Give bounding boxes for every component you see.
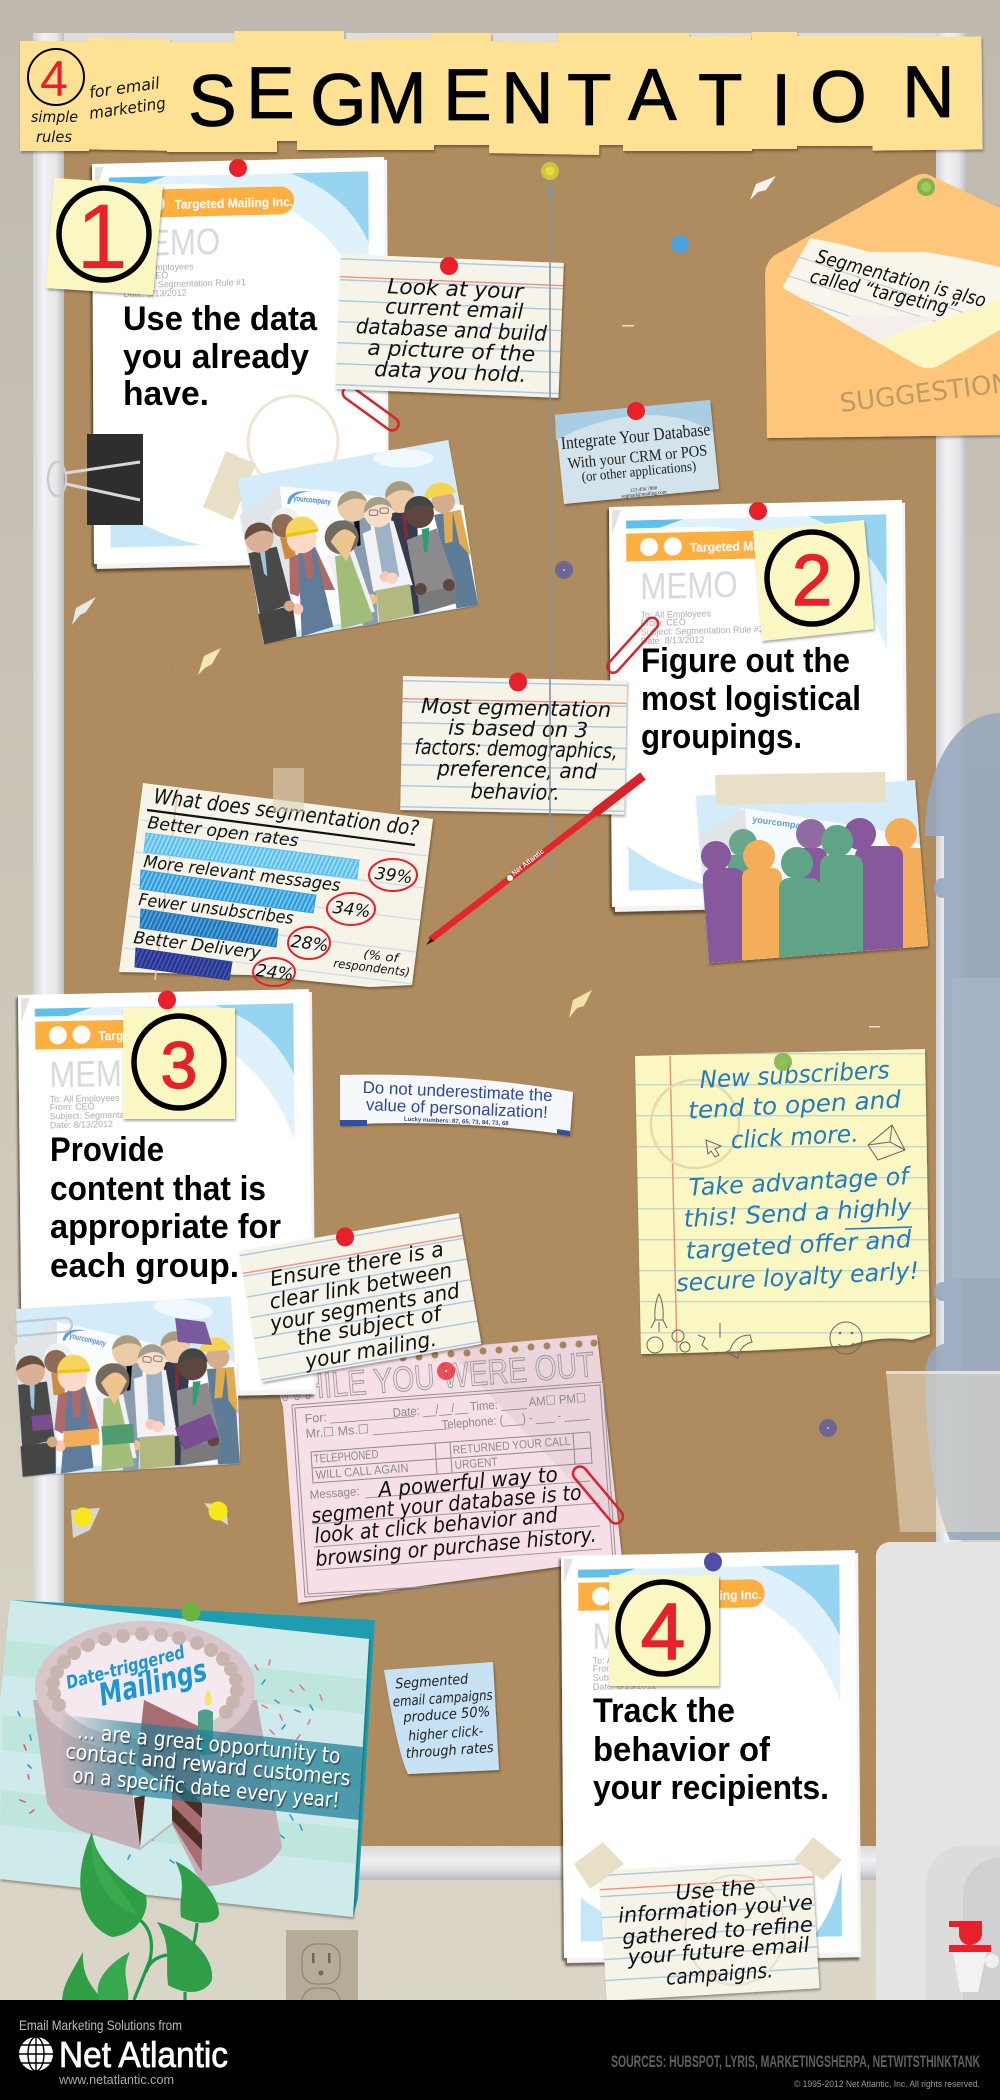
memo 2 details: Date: 8/13/2012 — [641, 635, 704, 646]
red pen: Net Atlantic — [511, 848, 546, 878]
index note: most segmentation: is based on 3 — [448, 716, 588, 742]
row: better delivery 24%: 24% — [255, 961, 295, 985]
Net Atlantic wordmark: Net Atlantic — [59, 2034, 228, 2075]
while you were out pink note: TELEPHONED — [313, 1447, 379, 1466]
memo 1 details: From: CEO — [123, 270, 168, 281]
fortune slip: personalization: Lucky numbers: 87, 65, 73, 84, 73, 68 — [404, 1117, 509, 1127]
red paperclip on memo 1 — [340, 384, 401, 433]
photo: crew holding envelopes — [0, 1271, 260, 1502]
sticky note with number 2 — [753, 520, 874, 641]
memo 4 details — [593, 1653, 717, 1692]
sticky note with number 3 — [123, 1008, 235, 1119]
while you were out pink note — [270, 1335, 622, 1603]
sticky note with number 1: 1 — [76, 186, 128, 288]
business card: integrate your database: Integrate Your Database — [560, 419, 711, 453]
title subtitle: for email marketing: marketing — [88, 93, 167, 123]
memo 3 details: Date: 8/13/2012 — [50, 1119, 113, 1130]
memo 4 heading: track the behavior: behavior of — [593, 1731, 771, 1769]
pin: green on yellow note — [774, 1053, 792, 1071]
orange group — [742, 840, 782, 968]
memo 4 heading: track the behavior: your recipients. — [593, 1769, 829, 1807]
blue handwriting — [676, 1056, 920, 1297]
row: more relevant messages 34%: 34% — [332, 898, 372, 922]
envelope: suggestion — [765, 174, 1000, 438]
cork board surface — [64, 45, 936, 1846]
card title: Date-triggered — [64, 1642, 188, 1694]
row: fewer unsubscribes 28%: Fewer unsubscribes — [137, 890, 295, 929]
row: more relevant messages 34%: More relevant messages — [142, 852, 341, 896]
title subtitle: for email marketing: for email — [88, 73, 161, 102]
electrical outlet — [286, 1930, 358, 2018]
blue handwriting: this! Send a highly — [683, 1193, 913, 1233]
frosting beads — [46, 1627, 244, 1719]
row: better open rates 39% — [144, 813, 417, 891]
red pen — [426, 776, 643, 945]
pin: red on memo 2 — [749, 502, 767, 520]
while you were out pink note: WILL CALL AGAIN — [315, 1461, 409, 1482]
chart title: What does segmentation do? — [152, 784, 420, 841]
fortune slip: personalization: value of personalization! — [366, 1095, 548, 1122]
index note: ensure clear link: Ensure there is a — [268, 1237, 446, 1291]
memo 2 details: To: All Employees — [641, 609, 712, 620]
green group — [779, 825, 863, 968]
pin: yellow left with torn corner — [71, 1508, 100, 1538]
water cooler bottle — [925, 713, 1000, 1540]
envelope front pocket — [766, 278, 1000, 438]
memo 4 MEMO heading: MEMO — [592, 1613, 690, 1657]
form labels — [304, 1391, 591, 1441]
title subtitle: for email marketing — [88, 73, 167, 123]
business card: integrate your database: segmail@mailing.com — [621, 490, 667, 500]
chart note: what does segmentation do — [119, 783, 433, 987]
while you were out pink note: URGENT — [454, 1455, 499, 1472]
back row figures — [728, 818, 929, 968]
memo 4 details: To: All Employees — [593, 1654, 664, 1666]
index note: most segmentation: behavior. — [470, 779, 560, 805]
note inside envelope — [780, 238, 1000, 370]
index note: ensure clear link: your mailing. — [302, 1327, 438, 1374]
logo text: yourcompany — [68, 1331, 107, 1348]
handwritten message — [310, 1462, 597, 1571]
title badge: 4 simple rules: simple — [31, 108, 78, 126]
index note: look at your data: database and build — [355, 314, 548, 346]
memo 3 details — [50, 1092, 172, 1130]
chart footnote: respondents) — [333, 956, 411, 979]
pin: red on business card — [627, 402, 645, 420]
index note: use the information: information you've — [617, 1890, 814, 1928]
index note: ensure clear link: your segments and — [267, 1279, 462, 1336]
pin: red on note 1 — [440, 257, 458, 275]
row: better open rates 39%: Better open rates — [146, 813, 300, 852]
row: better delivery 24%: Better Delivery — [132, 928, 263, 964]
water bottle highlight panel — [952, 978, 1000, 1278]
blue handwriting: tend to open and — [687, 1085, 902, 1125]
title badge: 4 simple rules — [28, 49, 84, 146]
date-triggered mailings card — [0, 1600, 375, 1917]
handwritten message: look at click behavior and — [313, 1503, 559, 1548]
memo 3 details: Subject: Segmentation Rule #3 — [50, 1109, 172, 1121]
form labels: Mr.☐ Ms.☐ ___________ — [305, 1416, 450, 1441]
chart footnote: (% of — [363, 947, 401, 965]
title badge: 4 simple rules: rules — [36, 128, 72, 146]
outlined heading: WHILE YOU WERE OUT — [276, 1345, 596, 1409]
blue handwriting: Take advantage of — [688, 1162, 913, 1202]
pin: green on envelope — [917, 178, 935, 196]
blue sticky: segmented campaigns — [384, 1662, 499, 1774]
memo 1 coffee ring — [248, 396, 338, 488]
business card: integrate your database: 123.456.7890 — [630, 486, 658, 494]
index note: use the information: campaigns. — [665, 1958, 774, 1990]
water cooler base — [876, 1542, 1000, 2000]
business card: integrate your database: (or other applications) — [581, 459, 697, 485]
pen logo — [507, 875, 513, 881]
form labels: For: ____________ — [304, 1403, 415, 1426]
memo 3 MEMO heading: MEMO — [49, 1052, 146, 1095]
pin: red on memo 1 — [229, 159, 247, 177]
doodle: cubes and dinosaur — [647, 1323, 752, 1358]
sticky note with number 2: 2 — [792, 541, 832, 621]
teal banner — [57, 1715, 363, 1820]
tape right on note — [794, 1837, 842, 1880]
memo 3 heading: provide content: appropriate for — [50, 1208, 281, 1246]
paper scraps on cork — [72, 176, 880, 1028]
memo 1 heading: use the data: have. — [123, 375, 209, 413]
blue sticky: segmented campaigns: email campaigns — [392, 1688, 493, 1710]
memo 3 sheet — [18, 989, 316, 1400]
handwritten message: browsing or purchase history. — [314, 1522, 597, 1571]
memo 3 heading: provide content: each group. — [50, 1247, 239, 1285]
index note: most segmentation — [400, 676, 627, 815]
pin: yellow right with torn corner — [204, 1502, 228, 1525]
note inside envelope: called “targeting” — [808, 265, 959, 321]
index note: look at your data: data you hold. — [374, 357, 527, 387]
blue sticky: segmented campaigns: higher click- — [408, 1723, 484, 1745]
index note: most segmentation: preference, and — [436, 756, 598, 784]
memo 2 letterhead: Targeted Mailing Inc. — [690, 537, 809, 555]
translucent tape on chart note — [273, 768, 304, 812]
blue sticky: segmented campaigns: produce 50% — [402, 1704, 491, 1726]
memo 3 heading: provide content: Provide — [50, 1131, 164, 1169]
yellow lined note: new subscribers — [635, 1049, 930, 1358]
memo 4 letterhead: Targeted Mailing Inc. — [642, 1587, 762, 1605]
chart footnote — [333, 947, 411, 979]
form labels: Telephone: (___) - ___ - ____ — [441, 1406, 591, 1432]
photo: mailing crew — [237, 440, 478, 644]
photo: silhouette groups — [696, 780, 930, 968]
form writing lines — [312, 1481, 602, 1570]
index note: look at your data: Look at your — [387, 274, 525, 304]
memo 4 heading: track the behavior: Track the — [593, 1692, 735, 1730]
memo 2 heading: figure out the groupings — [641, 642, 861, 756]
index note: look at your data: current email — [385, 294, 524, 324]
tape on memo 1 — [203, 451, 256, 520]
sticky note with number 4: 4 — [641, 1587, 685, 1676]
memo 1 sheet — [92, 157, 389, 569]
memo 1 letterhead: Targeted Mailing Inc. — [174, 194, 293, 212]
business card: integrate your database: With your CRM or POS — [567, 442, 708, 473]
sticky note with number 4 — [609, 1575, 719, 1686]
footer tagline: Email Marketing Solutions from — [19, 2017, 182, 2033]
confetti sprinkles — [18, 1660, 322, 1863]
pin: blue-purple on memo 4 — [704, 1552, 722, 1572]
memo 2 details — [641, 607, 764, 646]
blue sticky: segmented campaigns: through rates — [405, 1740, 494, 1762]
memo 2 heading: figure out the groupings: Figure out the — [641, 642, 850, 680]
copyright: © 1995-2012 Net Atlantic, Inc. All rights reserved. — [794, 2079, 980, 2090]
memo 2 details: From: CEO — [641, 617, 686, 628]
title: segmentation: SEGMENTATION — [188, 52, 955, 142]
memo 1 details — [123, 260, 246, 299]
row: fewer unsubscribes 28% — [137, 890, 330, 959]
doodle: cursor — [706, 1140, 721, 1157]
blue handwriting: click more. — [730, 1120, 859, 1154]
handwritten message: A powerful way to — [375, 1462, 559, 1502]
pin: purple — [555, 561, 573, 579]
water cooler red tap — [949, 1921, 991, 1952]
memo 1 heading: use the data: Use the data — [123, 300, 318, 338]
index note: use the information: Use the — [675, 1875, 756, 1905]
paper cup stack — [886, 1371, 1000, 1532]
globe logo — [19, 2037, 53, 2071]
purple group — [701, 818, 903, 968]
sticky note with number 1 — [46, 178, 163, 295]
memo 1 details: Date: 8/13/2012 — [123, 288, 187, 299]
memo 3 heading: provide content: content that is — [50, 1170, 266, 1208]
pin: translucent red on pink note — [437, 1362, 455, 1380]
memo 2 heading: figure out the groupings: groupings. — [641, 718, 802, 756]
form checkbox table — [311, 1432, 592, 1483]
red paperclip on memo 2 — [605, 615, 661, 675]
while you were out pink note: Message: — [309, 1484, 360, 1502]
memo 1 details: Subject: Segmentation Rule #1 — [123, 277, 246, 290]
memo 3 letterhead: Targeted Mailing Inc. — [98, 1026, 217, 1043]
doodle: rocket — [651, 1294, 667, 1332]
index note: most segmentation: Most egmentation — [421, 694, 611, 722]
memo 3 details: To: All Employees — [50, 1093, 120, 1104]
doodle: smiley — [830, 1322, 862, 1354]
memo 1 details: To: All Employees — [123, 262, 194, 273]
index note: use the information — [599, 1858, 819, 2001]
form labels: Date: __/__/__ Time: ____ AM☐ PM☐ — [392, 1391, 587, 1420]
website: www.netatlantic.com — [58, 2072, 174, 2087]
memo 1 heading: use the data — [123, 300, 318, 413]
spiral holes — [400, 1340, 598, 1362]
memo 3 details: From: CEO — [50, 1101, 95, 1112]
memo 2 sheet — [609, 500, 908, 912]
logo text: yourcompany — [752, 814, 812, 832]
row: better delivery 24% — [132, 928, 295, 986]
index note: use the information: your future email — [626, 1933, 810, 1969]
index note: ensure clear link: clear link between — [268, 1258, 454, 1314]
doodle: envelope — [868, 1125, 905, 1160]
pin: red on ensure note — [336, 1228, 354, 1246]
hanging string with yellow pin — [541, 162, 559, 876]
memo 1 MEMO heading: MEMO — [123, 221, 220, 264]
cake — [33, 1621, 282, 1887]
memo 2 heading: figure out the groupings: most logistical — [641, 680, 861, 718]
banner text: ... are a great opportunity to — [77, 1719, 342, 1768]
form border — [292, 1382, 617, 1597]
title sticky notes row — [20, 31, 983, 155]
business card: integrate your database — [555, 400, 719, 505]
banner text: contact and reward customers — [65, 1739, 352, 1790]
index note: ensure clear link — [239, 1213, 481, 1382]
cake slice cut — [133, 1700, 202, 1872]
title badge: 4 simple rules: 4 — [40, 51, 68, 107]
fortune slip: personalization — [340, 1075, 573, 1136]
index note: look at your data — [336, 254, 564, 398]
index note: ensure clear link: the subject of — [295, 1301, 446, 1351]
memo 4 details: Subject: Segmentation Rule #4 — [593, 1670, 716, 1683]
candle — [198, 1689, 213, 1755]
memo 2 MEMO heading: MEMO — [640, 564, 738, 607]
footer bar — [0, 2000, 1000, 2100]
cake: Mailings — [95, 1652, 211, 1714]
tape on silhouette photo — [715, 772, 886, 805]
blue handwriting: targeted offer and — [685, 1225, 913, 1265]
pin: red on note 2 — [509, 672, 527, 692]
index note: look at your data: a picture of the — [367, 336, 536, 366]
pin: purple lower — [819, 1419, 837, 1437]
memo 4 details: Date: 8/13/2012 — [593, 1681, 657, 1692]
blue handwriting: New subscribers — [699, 1056, 890, 1094]
envelopes held by crew — [31, 1318, 219, 1450]
blue sticky: segmented campaigns: Segmented — [395, 1671, 469, 1693]
banner text: on a specific date every year! — [72, 1763, 341, 1813]
memo 3 heading: provide content — [50, 1131, 281, 1285]
blue handwriting: secure loyalty early! — [676, 1257, 920, 1297]
row: more relevant messages 34% — [140, 852, 375, 925]
banner text — [65, 1719, 352, 1813]
tape left on note — [574, 1842, 624, 1889]
red paperclip on pink note — [570, 1464, 626, 1526]
index note: use the information: gathered to refine — [621, 1912, 814, 1950]
memo 2 details: Subject: Segmentation Rule #2 — [641, 624, 764, 637]
handwritten message: segment your database is to — [310, 1480, 582, 1528]
memo 1 heading: use the data: you already — [123, 338, 309, 376]
pin: green on card — [182, 1602, 200, 1622]
silver paperclip on crew photo — [10, 1317, 72, 1337]
row: fewer unsubscribes 28%: 28% — [290, 932, 330, 956]
fortune slip: personalization: Do not underestimate the — [362, 1078, 553, 1105]
mint stripes — [0, 1640, 366, 1864]
pin: blue — [671, 235, 689, 253]
coffee ring — [651, 1080, 739, 1168]
index note: most segmentation: factors: demographics, — [414, 735, 618, 763]
memo 4 heading: track the behavior — [593, 1692, 829, 1807]
logo text: yourcompany — [293, 494, 332, 507]
water cooler cup — [953, 1951, 999, 1992]
memo 4 sheet — [561, 1550, 861, 1963]
memo 4 details: From: CEO — [593, 1663, 638, 1674]
while you were out pink note: RETURNED YOUR CALL — [452, 1434, 571, 1457]
plant — [62, 1832, 219, 2000]
binder clip — [48, 434, 143, 525]
row: better open rates 39%: 39% — [374, 864, 414, 888]
sticky note with number 3: 3 — [161, 1028, 197, 1102]
pin: red on memo 3 — [158, 990, 176, 1010]
